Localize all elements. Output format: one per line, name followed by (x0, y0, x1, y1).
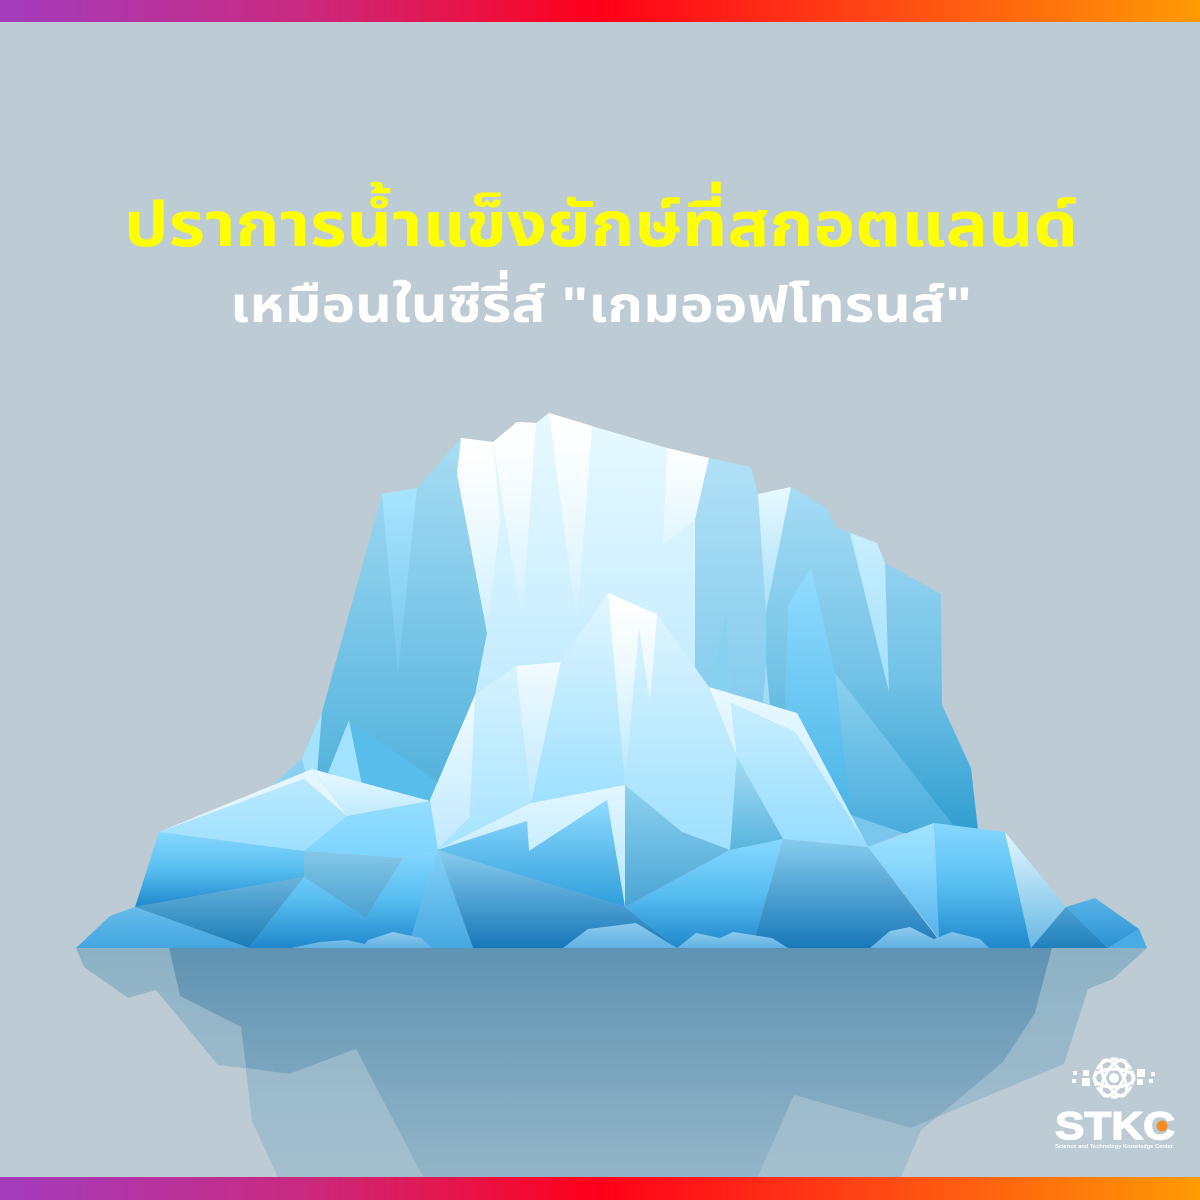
central front peak (430, 593, 868, 907)
top gradient bar (0, 0, 1200, 22)
underwater reflection of the iceberg (76, 948, 1147, 1177)
icon: pixel squares (1072, 1069, 1155, 1086)
iceberg above water (76, 413, 1147, 948)
reflection: pale outer shape (76, 948, 1147, 1177)
left front ledge (76, 769, 677, 948)
waterline ice lumps (291, 923, 989, 948)
logo: STKC (1055, 1056, 1175, 1150)
bottom gradient bar (0, 1177, 1200, 1200)
back ridge: right faces (695, 458, 978, 847)
icon: atom emblem (1094, 1056, 1134, 1100)
logo wordmark: STKC (1055, 1105, 1175, 1148)
title: ปราการน้ำแข็งยักษ์ที่สกอตแลนด์ (124, 181, 1078, 260)
back ridge: left face (268, 438, 487, 802)
logo tagline: Science and Technology Knowledge Center (1055, 1144, 1173, 1150)
right front ledge (625, 823, 1147, 948)
logo orange dot (1156, 1120, 1168, 1132)
reflection: lower right pale facet (758, 1095, 937, 1177)
reflection: dark core (169, 948, 1052, 1177)
reflection: lower left pale facet (246, 1049, 423, 1177)
subtitle: เหมือนในซีรี่ส์ "เกมออฟโทรนส์" (230, 270, 972, 333)
back ridge: central bright face (430, 413, 709, 800)
